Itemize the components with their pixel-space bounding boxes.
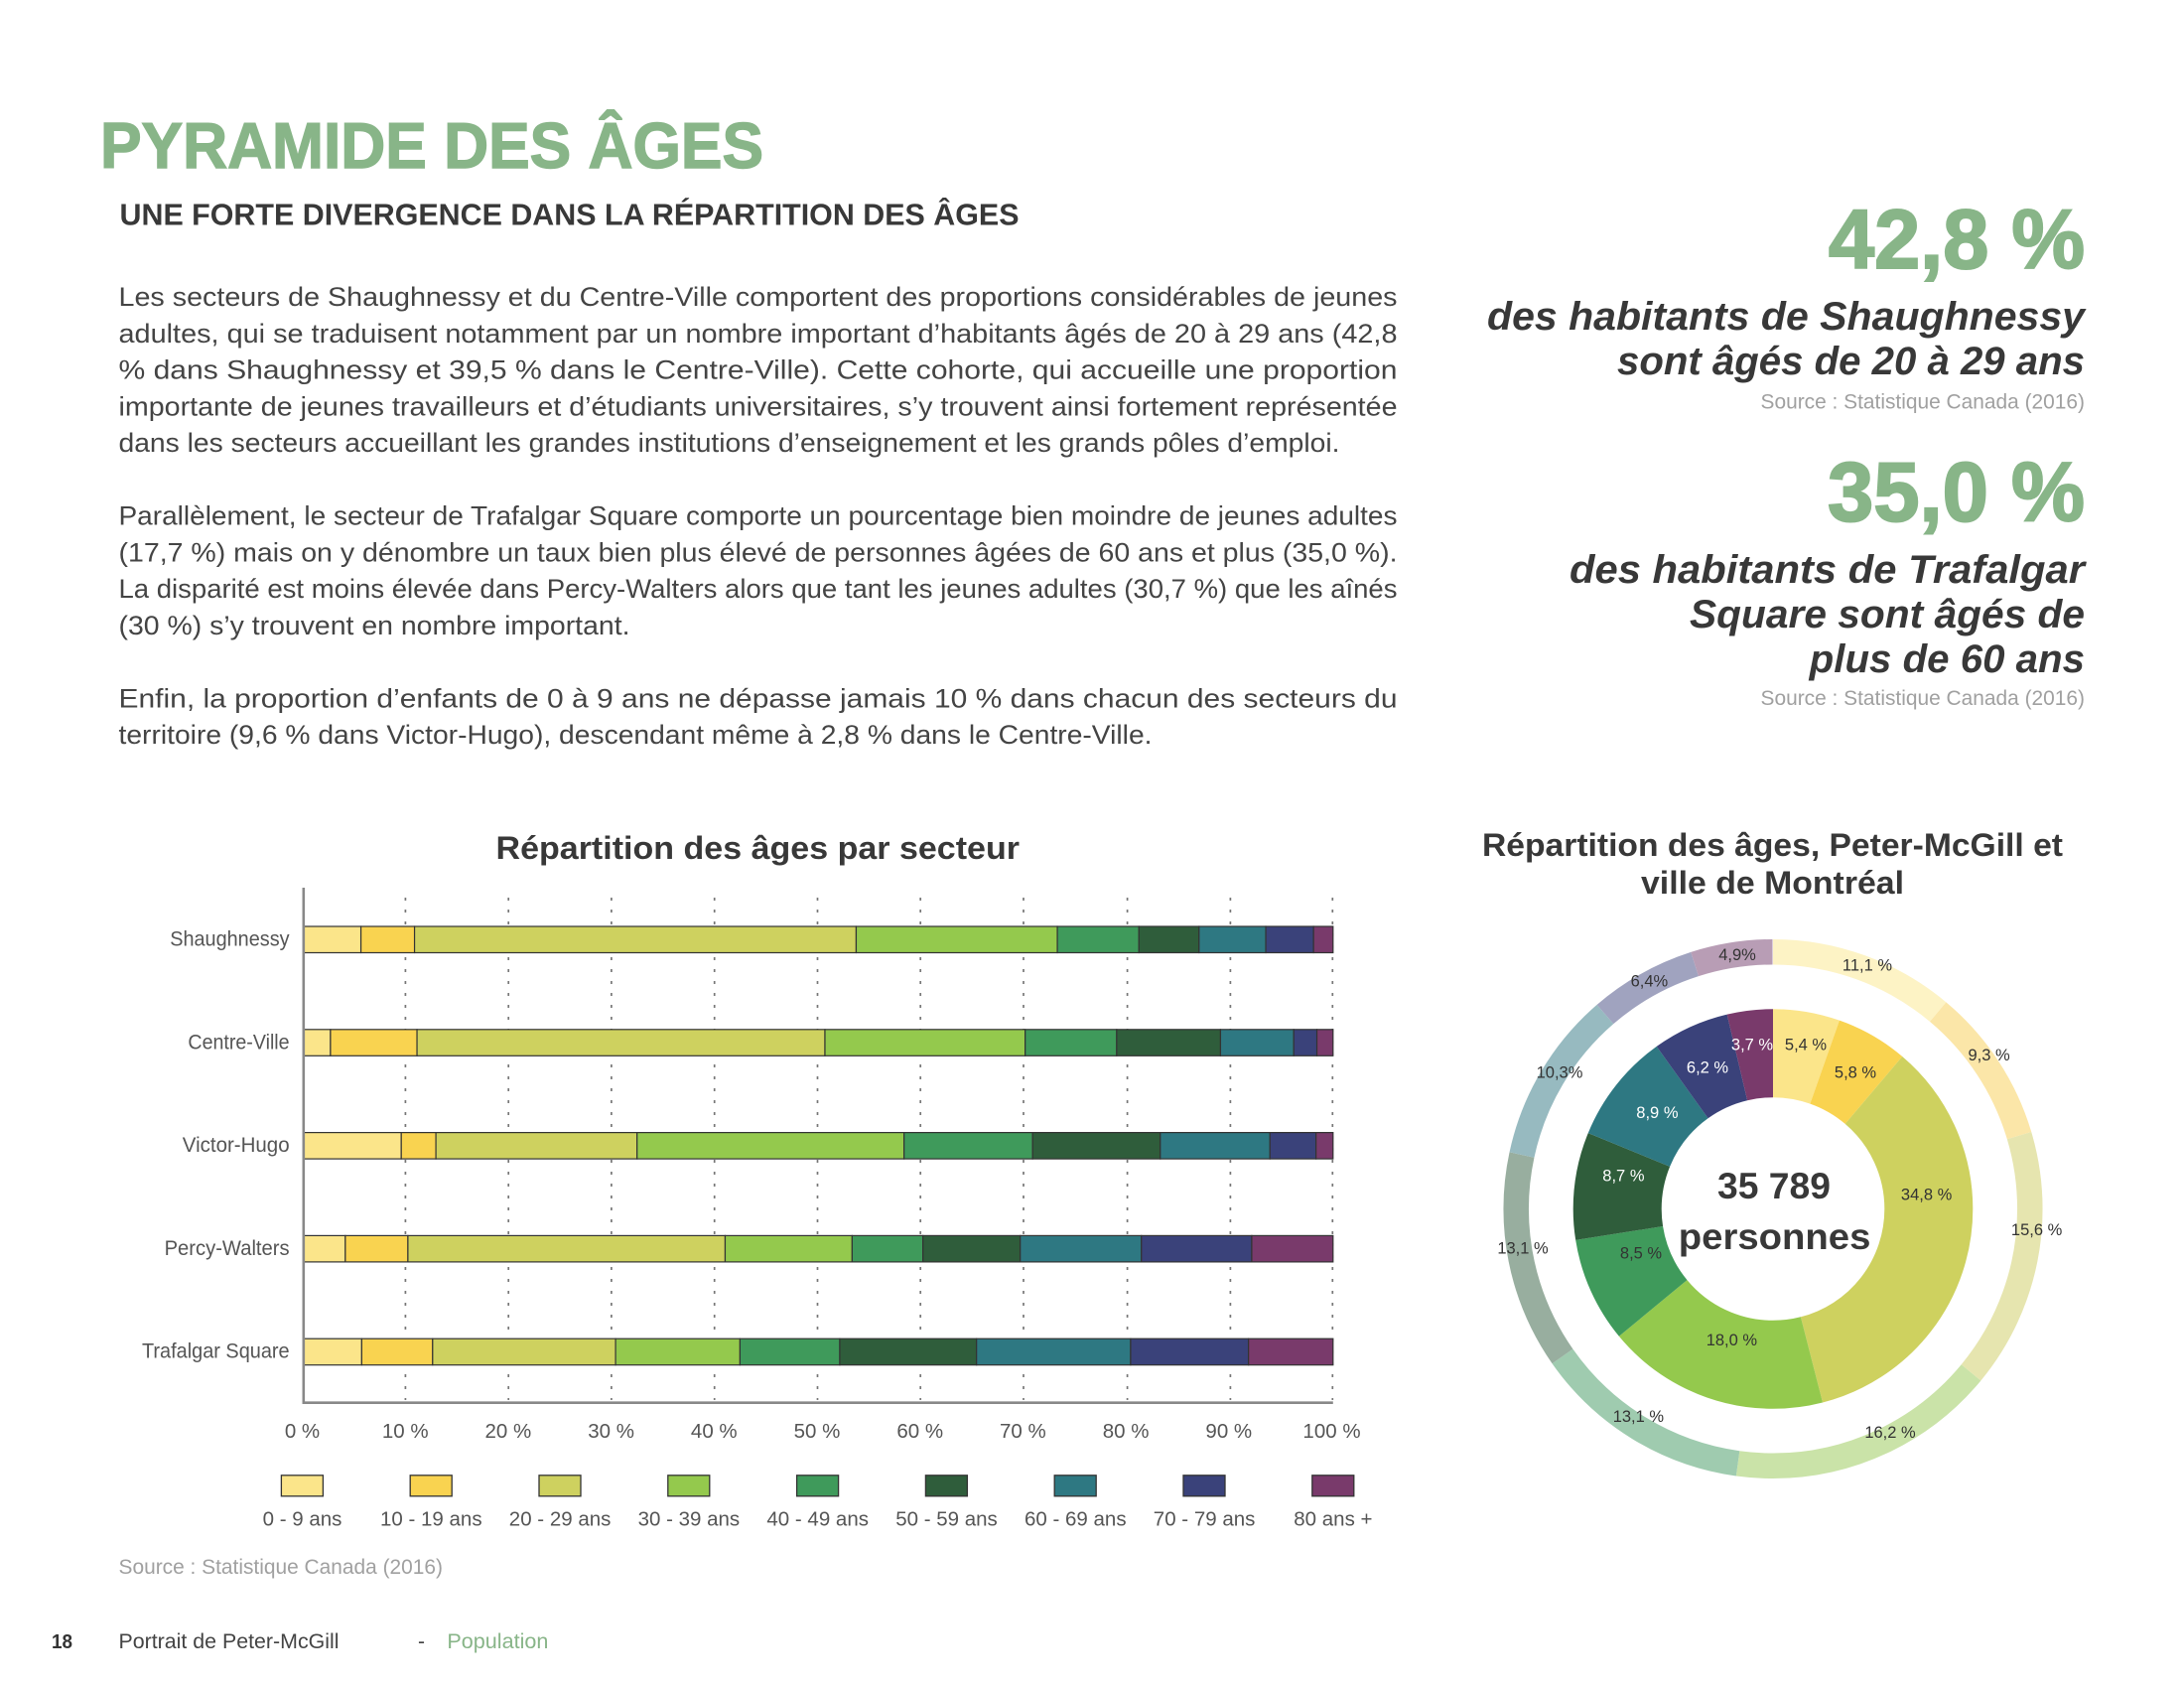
legend labels: 30 - 39 ans — [638, 1507, 740, 1530]
axes — [304, 888, 1333, 1403]
section name: Population — [447, 1630, 548, 1653]
row labels: Shaughnessy — [170, 927, 290, 951]
chart source: Source : Statistique Canada (2016) — [119, 1556, 443, 1579]
legend labels: 80 ans + — [1294, 1507, 1373, 1530]
legend labels: 20 - 29 ans — [509, 1507, 611, 1530]
inner ring labels: 5,4 % — [1785, 1037, 1827, 1055]
source: Source : Statistique Canada (2016) — [1761, 391, 2085, 413]
bar: Centre-Ville — [304, 1030, 1333, 1055]
legend labels: 50 - 59 ans — [895, 1507, 998, 1530]
paragraph 2: (17,7 %) mais on y dénombre un taux bien plus élevé de personnes âgées de 60 ans et plus (35,0 %). — [119, 537, 1398, 567]
callout text: des habitants de Trafalgar — [1570, 548, 2088, 592]
big number: 42,8 % — [1829, 193, 2085, 286]
x axis labels: 20 % — [485, 1420, 531, 1443]
x axis labels: 30 % — [588, 1420, 634, 1443]
legend labels: 60 - 69 ans — [1024, 1507, 1127, 1530]
inner ring labels: 18,0 % — [1706, 1332, 1757, 1349]
legend — [263, 1476, 1373, 1530]
inner ring labels: 34,8 % — [1901, 1187, 1953, 1204]
paragraph 1: Les secteurs de Shaughnessy et du Centre-Ville comportent des proportions considérables de jeunes — [119, 282, 1398, 312]
outer ring: ville de Montréal — [1516, 952, 2030, 1466]
inner ring labels — [1602, 1037, 1953, 1349]
x axis labels: 100 % — [1302, 1420, 1361, 1443]
callout text: sont âgés de 20 à 29 ans — [1617, 340, 2085, 383]
document title: Portrait de Peter-McGill — [119, 1630, 340, 1653]
inner ring labels: 5,8 % — [1835, 1064, 1876, 1082]
paragraph 1 — [119, 282, 1398, 458]
paragraph 2: Parallèlement, le secteur de Trafalgar Square comporte un pourcentage bien moindre de jeunes adultes — [119, 501, 1398, 531]
callout text: plus de 60 ans — [1809, 637, 2085, 681]
separator: - — [418, 1630, 425, 1653]
legend labels — [263, 1507, 1373, 1530]
row labels: Percy-Walters — [165, 1237, 290, 1260]
bar: Shaughnessy — [304, 926, 1333, 953]
paragraph 3 — [119, 683, 1398, 750]
chart heading: Répartition des âges par secteur — [496, 830, 1020, 866]
footer — [52, 1630, 548, 1653]
inner ring labels: 6,2 % — [1687, 1059, 1728, 1077]
paragraph 2: La disparité est moins élevée dans Percy-Walters alors que tant les jeunes adultes (30,7 %) que les aînés — [119, 574, 1398, 604]
row labels: Trafalgar Square — [142, 1340, 290, 1363]
inner ring: Peter-McGill — [1617, 1054, 1929, 1364]
center total — [1679, 1166, 1870, 1257]
legend labels: 40 - 49 ans — [766, 1507, 869, 1530]
callout text: des habitants de Shaughnessy — [1487, 295, 2087, 339]
row labels — [142, 927, 290, 1363]
inner ring labels: 8,5 % — [1620, 1245, 1662, 1263]
center total: personnes — [1679, 1216, 1870, 1257]
paragraph 1: dans les secteurs accueillant les grandes institutions d’enseignement et les grands pôles d’emploi. — [119, 428, 1340, 458]
legend swatches — [281, 1476, 1354, 1496]
text block: body paragraphs — [119, 282, 1398, 750]
center total: 35 789 — [1717, 1166, 1831, 1206]
outer ring labels: 10,3% — [1537, 1064, 1583, 1082]
big number: 35,0 % — [1828, 445, 2085, 538]
x axis labels: 0 % — [285, 1420, 320, 1443]
bar: Percy-Walters — [304, 1235, 1333, 1262]
outer ring labels: 11,1 % — [1843, 957, 1892, 975]
legend labels: 10 - 19 ans — [380, 1507, 482, 1530]
row labels: Victor-Hugo — [183, 1134, 290, 1157]
outer ring labels: 6,4% — [1631, 973, 1669, 991]
donut heading: Répartition des âges, Peter-McGill et — [1482, 827, 2063, 863]
legend labels: 70 - 79 ans — [1154, 1507, 1255, 1530]
outer ring labels: 13,1 % — [1613, 1408, 1664, 1426]
paragraph 1: % dans Shaughnessy et 39,5 % dans le Centre-Ville). Cette cohorte, qui accueille une proportion — [119, 355, 1398, 385]
outer ring labels: 16,2 % — [1864, 1424, 1916, 1442]
paragraph 2: (30 %) s’y trouvent en nombre important. — [119, 611, 629, 640]
callout: 35,0 % Trafalgar Square — [1570, 445, 2088, 710]
page number: 18 — [52, 1631, 72, 1653]
x axis labels: 10 % — [382, 1420, 429, 1443]
bars — [304, 926, 1333, 1365]
x axis labels: 90 % — [1205, 1420, 1252, 1443]
outer ring labels: 4,9% — [1718, 946, 1756, 964]
x axis labels: 50 % — [794, 1420, 840, 1443]
paragraph 3: territoire (9,6 % dans Victor-Hugo), descendant même à 2,8 % dans le Centre-Ville. — [119, 720, 1152, 750]
callout: 42,8 % Shaughnessy — [1487, 193, 2087, 413]
inner ring labels: 8,9 % — [1636, 1104, 1679, 1122]
panel: donut chart — [1482, 827, 2063, 1466]
bar: Trafalgar Square — [304, 1338, 1333, 1365]
x axis labels: 80 % — [1103, 1420, 1149, 1443]
legend labels: 0 - 9 ans — [263, 1507, 341, 1530]
outer ring labels: 15,6 % — [2011, 1221, 2063, 1239]
paragraph 2 — [119, 501, 1398, 640]
outer ring labels: 13,1 % — [1497, 1240, 1549, 1258]
callout text — [1487, 295, 2087, 383]
inner ring labels: 8,7 % — [1602, 1168, 1645, 1186]
title: PYRAMIDE DES ÂGES — [100, 109, 763, 182]
donut heading: ville de Montréal — [1641, 865, 1904, 901]
callout text — [1570, 548, 2088, 681]
source: Source : Statistique Canada (2016) — [1761, 687, 2085, 710]
outer ring labels: 9,3 % — [1968, 1047, 2010, 1064]
x axis labels — [285, 1420, 1361, 1443]
donut heading — [1482, 827, 2063, 901]
x axis labels: 70 % — [1000, 1420, 1046, 1443]
x axis labels: 60 % — [896, 1420, 943, 1443]
callout text: Square sont âgés de — [1690, 593, 2085, 636]
panel: stacked bar chart — [119, 830, 1373, 1579]
grid lines — [405, 898, 1332, 1400]
x axis labels: 40 % — [691, 1420, 738, 1443]
paragraph 1: adultes, qui se traduisent notamment par un nombre important d’habitants âgés de 20 à 29 ans (42,8 — [119, 319, 1398, 349]
inner ring labels: 3,7 % — [1731, 1037, 1773, 1055]
bar: Victor-Hugo — [304, 1133, 1333, 1159]
paragraph 1: importante de jeunes travailleurs et d’étudiants universitaires, s’y trouvent ainsi fortement représentée — [119, 391, 1398, 421]
outer ring labels — [1497, 946, 2063, 1442]
row labels: Centre-Ville — [188, 1031, 290, 1054]
subtitle: UNE FORTE DIVERGENCE DANS LA RÉPARTITION DES ÂGES — [119, 197, 1019, 232]
paragraph 3: Enfin, la proportion d’enfants de 0 à 9 ans ne dépasse jamais 10 % dans chacun des secteurs du — [119, 683, 1398, 713]
